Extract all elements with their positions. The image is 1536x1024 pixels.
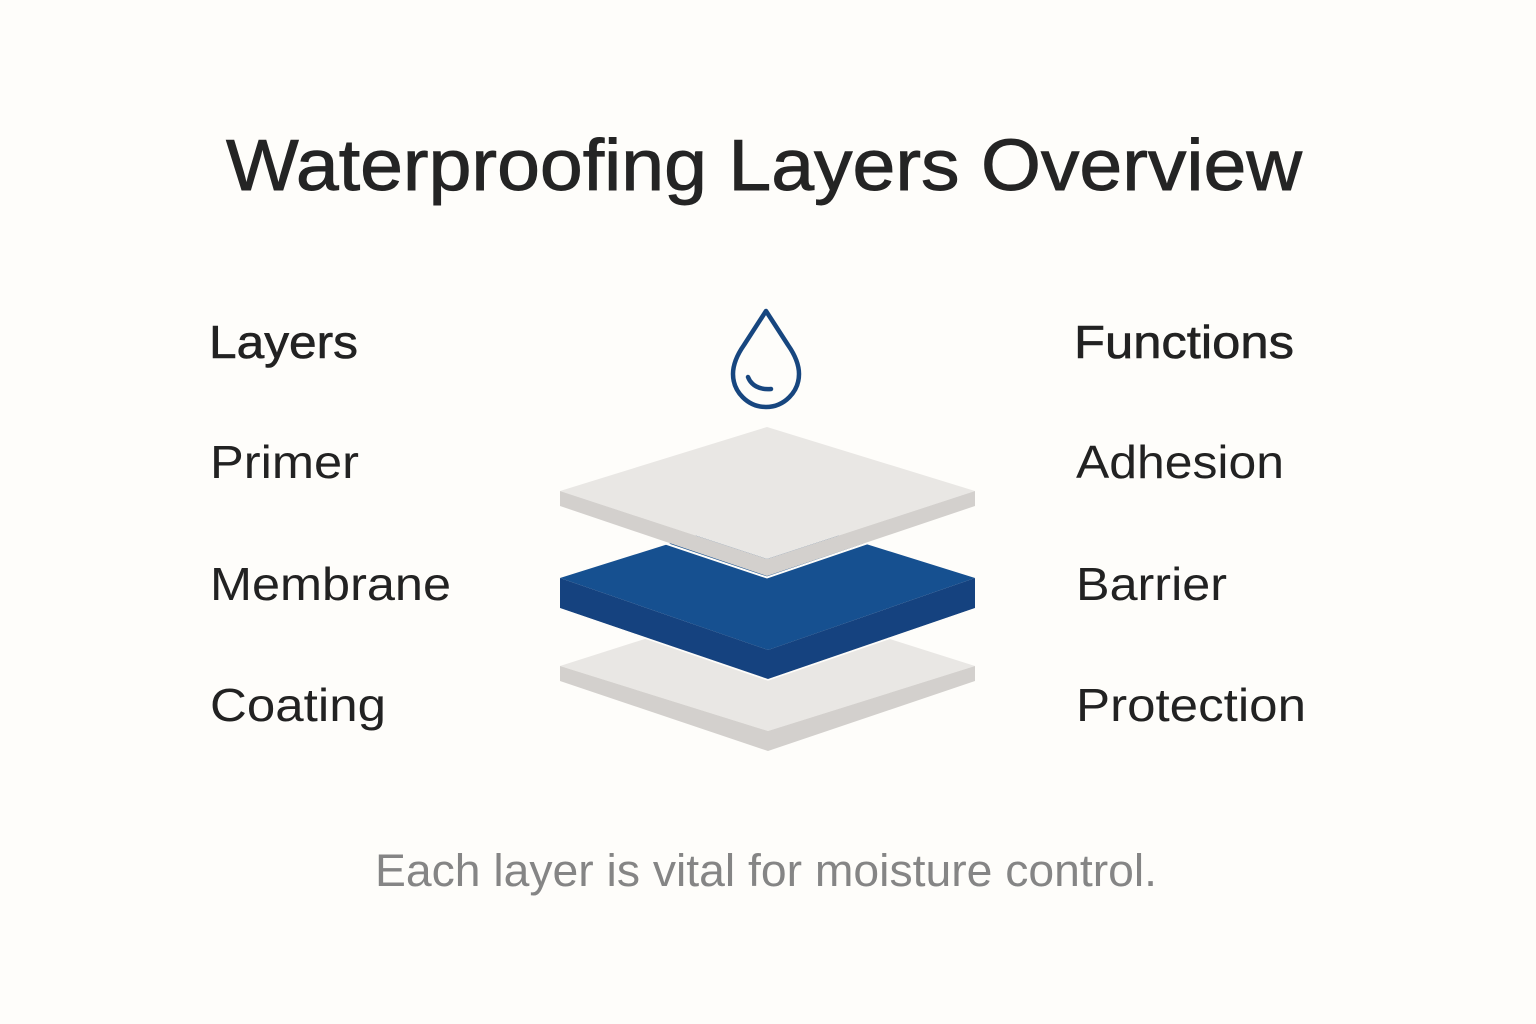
label: membrane: Membrane: [210, 558, 451, 610]
column: layers: [209, 316, 451, 731]
label: coating: Coating: [210, 679, 386, 731]
layer: blue membrane: [560, 513, 975, 680]
layer: top primer: [560, 427, 975, 578]
layer stack illustration: [560, 427, 975, 751]
label: protection: Protection: [1076, 679, 1306, 731]
label: adhesion: Adhesion: [1076, 436, 1284, 488]
layer: bottom coating: [560, 600, 975, 751]
heading: layers: Layers: [209, 316, 358, 368]
label: barrier: Barrier: [1076, 558, 1227, 610]
column: functions: [1074, 316, 1306, 731]
icon: water drop: [733, 311, 799, 407]
label: primer: Primer: [210, 436, 359, 488]
title: Waterproofing Layers Overview: [226, 126, 1303, 206]
heading: functions: Functions: [1074, 316, 1294, 368]
footer caption: Each layer is vital for moisture control.: [375, 845, 1157, 896]
